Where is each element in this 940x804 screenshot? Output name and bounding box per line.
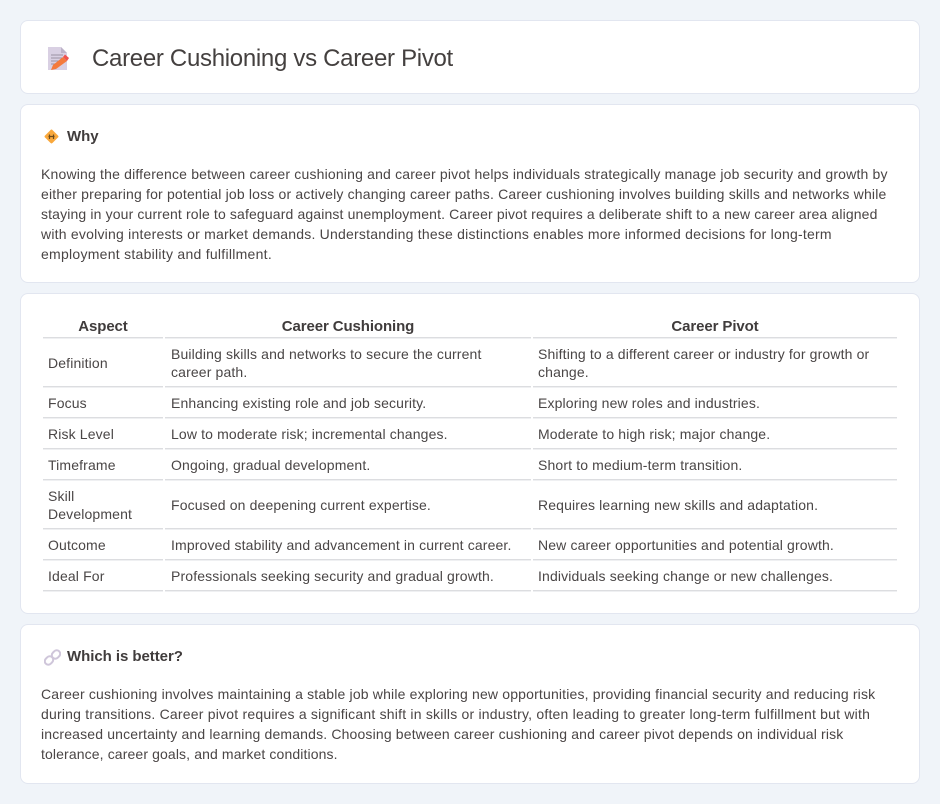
- row: timeframe: Timeframe: [48, 457, 116, 473]
- row: risk level: Risk Level: [48, 426, 114, 442]
- which is better paragraph: [41, 686, 876, 762]
- comparison table: change.: [538, 364, 589, 380]
- comparison table: Ongoing, gradual development.: [171, 457, 370, 473]
- header: career pivot: Career Pivot: [671, 318, 759, 335]
- comparison table: career path.: [171, 364, 247, 380]
- panel: comparison table: [20, 293, 920, 614]
- comparison table: Low to moderate risk; incremental changes.: [171, 426, 448, 442]
- row: skill development: Skill: [48, 488, 74, 504]
- row: focus: Focus: [48, 395, 87, 411]
- why paragraph: [41, 166, 888, 262]
- comparison table: New career opportunities and potential growth.: [538, 537, 834, 553]
- row: outcome: Outcome: [48, 537, 106, 553]
- comparison table: Shifting to a different career or industry for growth or: [538, 346, 869, 362]
- header: career cushioning: Career Cushioning: [282, 318, 414, 335]
- panel: why: employment stability and fulfillment.: [41, 246, 272, 262]
- comparison table: Improved stability and advancement in current career.: [171, 537, 511, 553]
- panel: which is better: [20, 624, 920, 784]
- title text: Career Cushioning vs Career Pivot: [92, 45, 453, 72]
- icon: memo: [48, 47, 69, 70]
- comparison table: Enhancing existing role and job security.: [171, 395, 426, 411]
- panel: why: Knowing the difference between career cushioning and career pivot helps individuals strategically manage job security and growth by: [41, 166, 888, 182]
- heading: which is better: Which is better?: [67, 648, 183, 665]
- panel: why: staying in your current role to safeguard against unemployment. Career pivot requires a deliberate shift to a new career area aligned: [41, 206, 878, 222]
- comparison table: Short to medium-term transition.: [538, 457, 742, 473]
- comparison table: Building skills and networks to secure the current: [171, 346, 481, 362]
- panel: which is better: increased uncertainty and learning demands. Choosing between career cushioning and career pivot depends on individual risk: [41, 726, 843, 742]
- comparison table: Individuals seeking change or new challenges.: [538, 568, 833, 584]
- icon: link: [44, 649, 61, 666]
- comparison table: Exploring new roles and industries.: [538, 395, 760, 411]
- panel: which is better: during transitions. Career pivot requires a significant shift in skills or industry, often leading to greater long-term fulfillment but with: [41, 706, 870, 722]
- heading: why: Why: [67, 128, 99, 145]
- header: aspect: Aspect: [78, 318, 128, 335]
- panel: why: either preparing for potential job loss or actively changing career paths. Career cushioning involves building skills and networks while: [41, 186, 886, 202]
- panel: which is better: Career cushioning involves maintaining a stable job while exploring new opportunities, providing financial security and reducing risk: [41, 686, 875, 702]
- comparison table: Focused on deepening current expertise.: [171, 497, 431, 513]
- panel: why: [20, 104, 920, 283]
- row: definition: Definition: [48, 355, 108, 371]
- comparison table: Moderate to high risk; major change.: [538, 426, 770, 442]
- comparison table: Development: [48, 506, 132, 522]
- panel: why: with evolving interests or market demands. Understanding these distinctions enables more informed decisions for long-term: [41, 226, 832, 242]
- icon: warning diamond: [44, 130, 58, 144]
- panel: title: [20, 20, 920, 94]
- panel: which is better: tolerance, career goals, and market conditions.: [41, 746, 338, 762]
- row: ideal for: Ideal For: [48, 568, 105, 584]
- comparison table: Requires learning new skills and adaptation.: [538, 497, 818, 513]
- comparison table: Professionals seeking security and gradual growth.: [171, 568, 494, 584]
